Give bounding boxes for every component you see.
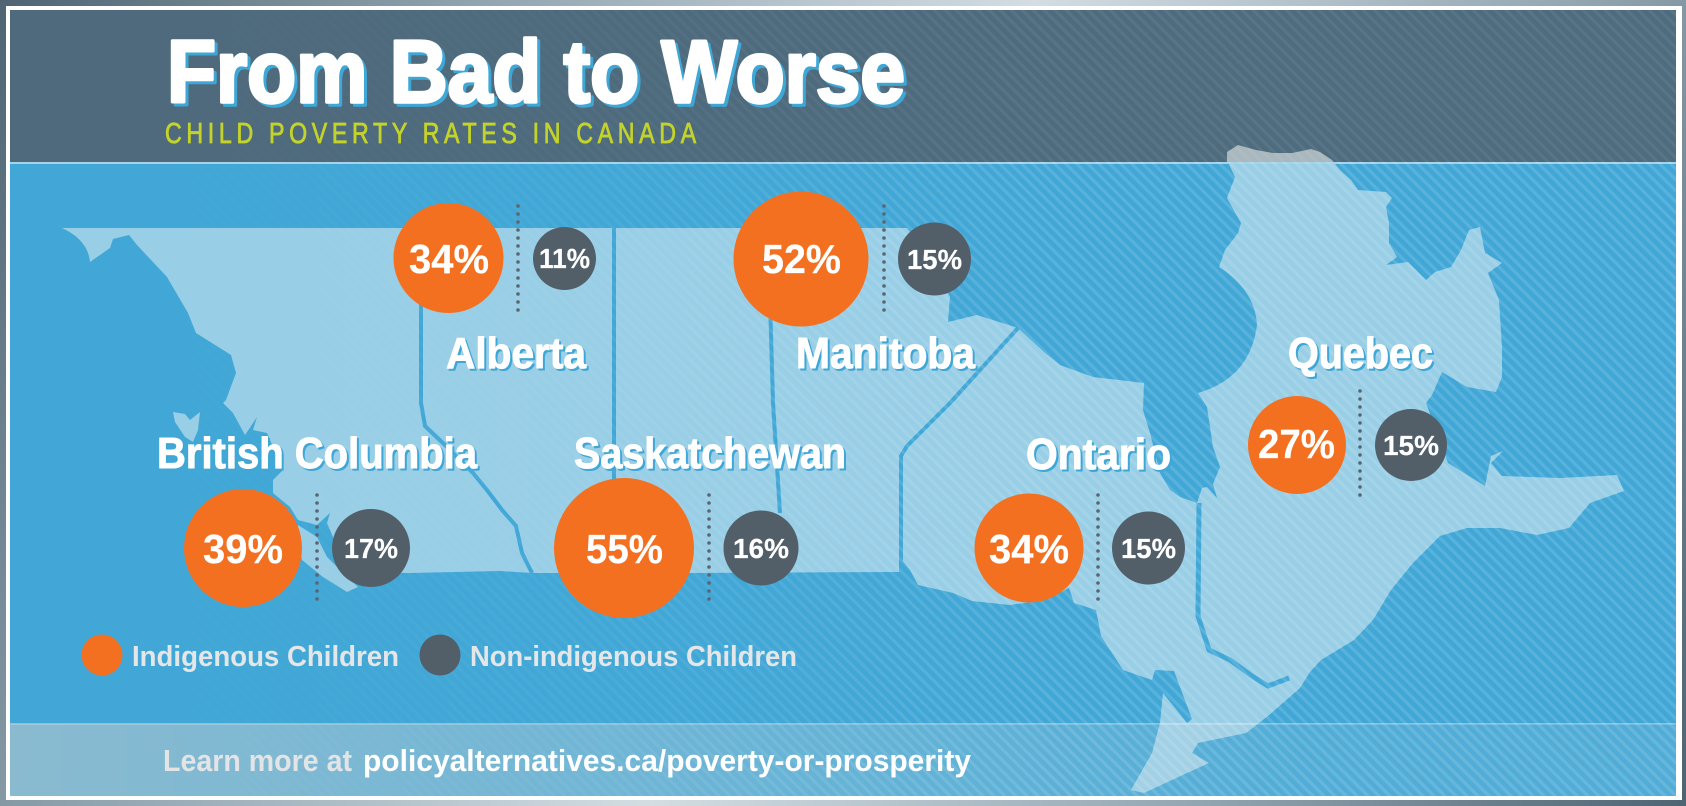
panel: Quebec: 27% [1258,421,1335,467]
footer link text: Learn more at [163,743,352,778]
panel: Ontario [974,430,1185,602]
legend: Non-indigenous Children [470,641,797,673]
panel: British Columbia [157,429,477,607]
panel: Manitoba: Manitoba [796,329,975,378]
panel: footer band [10,724,1676,796]
panel: Manitoba: 52% [762,236,841,282]
panel: British Columbia: British Columbia [157,429,477,478]
panel: Quebec: 15% [1383,430,1439,461]
map of southern Canada provinces [62,145,1624,793]
panel: Saskatchewan [554,429,846,618]
panel: Manitoba: 15% [907,244,962,275]
panel: Alberta: 11% [539,243,590,274]
panel: Saskatchewan: Saskatchewan [574,429,846,478]
provincial borders [421,228,1289,686]
panel: Alberta [394,203,596,378]
panel: Alberta: Alberta [446,329,586,378]
panel: Saskatchewan: 16% [733,533,789,564]
panel: Ontario: 15% [1121,533,1176,564]
top of Quebec seen through header [1227,145,1334,162]
legend: Indigenous Children [132,641,399,673]
panel: Ontario: Ontario [1026,430,1171,479]
panel: British Columbia: 17% [344,533,398,564]
panel: Alberta: 34% [409,236,489,282]
panel: Saskatchewan: 55% [586,526,663,572]
panel: British Columbia: 39% [203,526,283,572]
Haida Gwaii [173,412,200,442]
panel: header band [10,10,1676,162]
Vancouver Island [298,525,358,592]
panel: Manitoba [734,192,975,378]
panel: Quebec: Quebec [1288,329,1433,378]
legend [82,634,797,676]
header divider line [10,162,1676,164]
panel: Ontario: 34% [989,526,1069,572]
title: From Bad to Worse [167,22,905,121]
footer link text: policyalternatives.ca/poverty-or-prosperity [363,743,972,778]
panel: Quebec [1248,329,1447,498]
subtitle: CHILD POVERTY RATES IN CANADA [165,116,697,150]
